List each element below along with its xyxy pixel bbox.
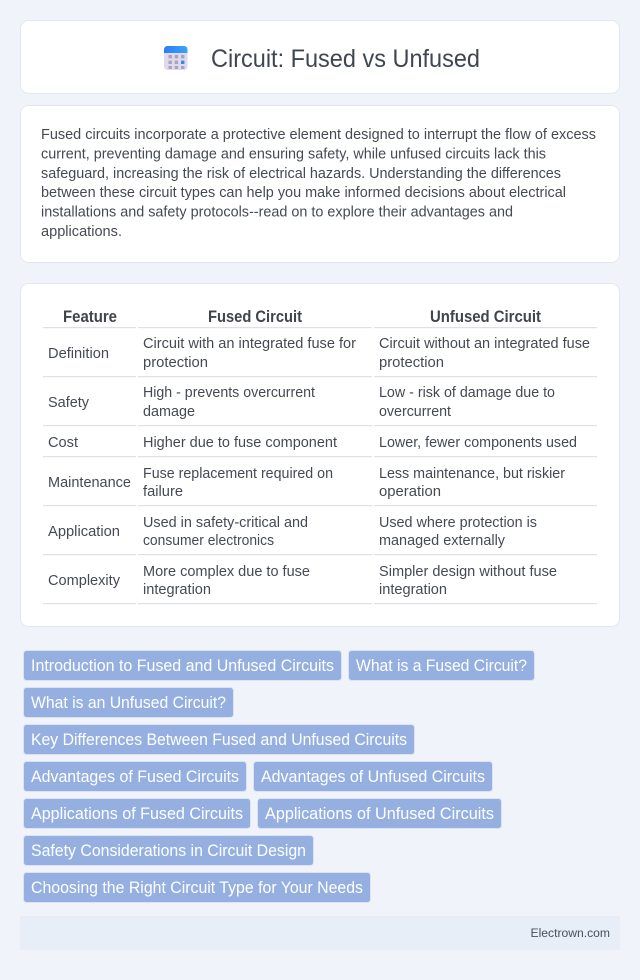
intro paragraph: installations and safety protocols--read on to explore their advantages and bbox=[41, 205, 513, 221]
tag: applications unfused bbox=[258, 798, 502, 828]
row: definition: protection bbox=[379, 355, 444, 371]
row: cost: Higher due to fuse component bbox=[143, 435, 337, 451]
panel: comparison table bbox=[20, 284, 620, 626]
table header row: Unfused Circuit bbox=[430, 308, 542, 326]
intro paragraph: current, preventing damage and ensuring safety, while unfused circuits lack this bbox=[41, 146, 546, 162]
tag: advantages fused bbox=[24, 762, 246, 792]
row: cost bbox=[48, 435, 577, 451]
tag: introduction bbox=[24, 650, 342, 680]
row: safety: Safety bbox=[48, 395, 90, 411]
tag: safety considerations: Safety Considerations in Circuit Design bbox=[31, 842, 306, 860]
tag: what is fused bbox=[348, 650, 534, 680]
intro paragraph: Fused circuits incorporate a protective element designed to interrupt the flow of excess bbox=[41, 127, 596, 143]
title: Circuit: Fused vs Unfused bbox=[211, 45, 480, 73]
row: maintenance: failure bbox=[143, 484, 183, 500]
tag: advantages unfused: Advantages of Unfused Circuits bbox=[261, 768, 485, 786]
row: safety: High - prevents overcurrent bbox=[143, 385, 315, 401]
tag: advantages unfused bbox=[254, 762, 492, 792]
table header row: Feature bbox=[63, 308, 117, 326]
row: maintenance: Less maintenance, but riskier bbox=[379, 466, 565, 482]
tag: what is unfused: What is an Unfused Circuit? bbox=[31, 694, 226, 712]
row: complexity: Complexity bbox=[48, 573, 121, 589]
row: definition: protection bbox=[143, 355, 208, 371]
intro paragraph: between these circuit types can help you make informed decisions about electrical bbox=[41, 185, 566, 201]
intro paragraph: applications. bbox=[41, 224, 122, 240]
row: application: Used where protection is bbox=[379, 515, 537, 531]
header panel bbox=[20, 20, 620, 94]
row: safety: Low - risk of damage due to bbox=[379, 385, 555, 401]
footer bbox=[20, 916, 620, 950]
row: application: Application bbox=[48, 524, 120, 540]
row: application: consumer electronics bbox=[143, 533, 274, 549]
tag: what is unfused bbox=[24, 688, 234, 718]
tag: choosing: Choosing the Right Circuit Type for Your Needs bbox=[31, 879, 363, 897]
row: safety: damage bbox=[143, 404, 195, 420]
row: cost: Lower, fewer components used bbox=[379, 435, 577, 451]
tag: introduction: Introduction to Fused and Unfused Circuits bbox=[31, 657, 334, 675]
row: safety: overcurrent bbox=[379, 404, 451, 420]
tag: safety considerations bbox=[24, 836, 314, 866]
row: definition: Definition bbox=[48, 346, 109, 362]
footer credit: Electrown.com bbox=[530, 926, 610, 940]
row: complexity: integration bbox=[379, 582, 447, 598]
tag: choosing bbox=[24, 872, 370, 902]
row: definition: Circuit with an integrated fuse for bbox=[143, 336, 356, 352]
intro paragraph bbox=[41, 127, 596, 240]
row: definition bbox=[48, 336, 590, 371]
row: maintenance: Fuse replacement required on bbox=[143, 466, 333, 482]
tag: what is fused: What is a Fused Circuit? bbox=[356, 657, 527, 675]
tag: applications fused: Applications of Fused Circuits bbox=[31, 805, 243, 823]
row: definition: Circuit without an integrated fuse bbox=[379, 336, 590, 352]
row: complexity: Simpler design without fuse bbox=[379, 564, 557, 580]
table header row: Fused Circuit bbox=[208, 308, 303, 326]
row: maintenance: Maintenance bbox=[48, 475, 131, 491]
tag: applications unfused: Applications of Unfused Circuits bbox=[265, 805, 494, 823]
row: complexity bbox=[48, 564, 557, 598]
intro paragraph: safeguard, increasing the risk of electrical hazards. Understanding the differences bbox=[41, 166, 561, 182]
row: safety bbox=[48, 385, 555, 420]
tag: key differences bbox=[24, 724, 414, 754]
row: maintenance bbox=[48, 466, 565, 500]
tag: applications fused bbox=[24, 798, 250, 828]
row: application bbox=[48, 515, 537, 549]
section tags bbox=[24, 650, 534, 902]
row: application: managed externally bbox=[379, 533, 506, 549]
row: complexity: More complex due to fuse bbox=[143, 564, 310, 580]
row: maintenance: operation bbox=[379, 484, 441, 500]
row: cost: Cost bbox=[48, 435, 78, 451]
icon: calendar bbox=[164, 46, 188, 70]
table header row bbox=[63, 308, 542, 326]
tag: key differences: Key Differences Between Fused and Unfused Circuits bbox=[31, 731, 407, 749]
tag: advantages fused: Advantages of Fused Circuits bbox=[31, 768, 239, 786]
row: application: Used in safety-critical and bbox=[143, 515, 308, 531]
row: complexity: integration bbox=[143, 582, 211, 598]
panel: introduction bbox=[20, 106, 620, 262]
